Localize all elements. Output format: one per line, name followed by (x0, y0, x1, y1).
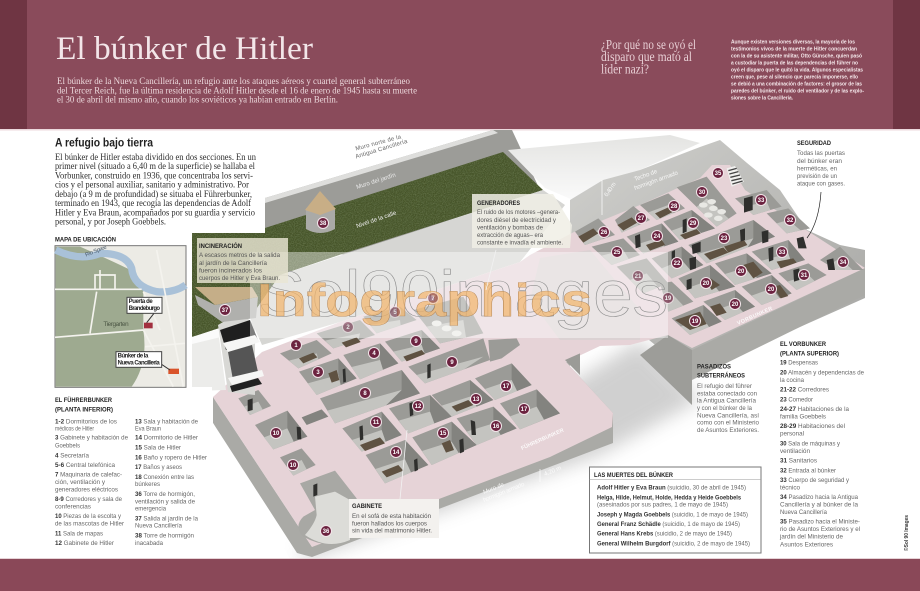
Vorbunker legend: 35 Pasadizo hacia el Ministe- (780, 518, 860, 526)
callout: incineración (197, 238, 288, 283)
box: las muertes del búnker: General Wilhelm Burgdorf (suicidio, 2 de mayo de 1945) (597, 540, 750, 548)
number markers (220, 168, 848, 536)
callout: pasadizos subterráneos: Nueva Cancillería, así (697, 412, 759, 419)
callout: seguridad: Todas las puertas (797, 150, 845, 157)
central grey block (530, 250, 640, 340)
Führerbunker legend heading (55, 395, 113, 414)
Führerbunker legend column 1: 8-9 Corredores y sala de (55, 496, 122, 503)
Führerbunker legend column 1: ción, ventilación y (55, 479, 106, 486)
text: garden labels: Nivel de la calle (356, 210, 398, 230)
number markers: 37 (222, 308, 229, 314)
Führerbunker legend column 2: Nueva Cancillería (135, 523, 182, 530)
Vorbunker legend: rio de Asuntos Exteriores y el (780, 526, 860, 533)
location map: Búnker de la (118, 354, 149, 360)
question answer text: testimonios vivos de la muerte de Hitler concuerdan (731, 46, 857, 52)
footer band (0, 558, 920, 591)
number markers: 19 (665, 296, 672, 302)
number markers: 17 (503, 384, 510, 390)
number markers: 9 (450, 360, 454, 366)
Vorbunker legend: 34 Pasadizo hacia la Antigua (780, 494, 858, 501)
box: las muertes del búnker: Joseph y Magda Goebbels (suicidio, 1 de mayo de 1945) (597, 512, 748, 518)
question answer text: Aunque existen versiones diversas, la mayoría de los (731, 39, 855, 45)
text: garden labels: Muro norte de la (355, 134, 403, 152)
number markers: 3 (316, 370, 320, 376)
number markers: 10 (273, 431, 280, 437)
number markers: 34 (840, 260, 847, 266)
garden wall and grass (192, 130, 565, 345)
intro text (57, 76, 417, 106)
section text: terminado en 1943, que recogía las dependencias de Adolf (55, 198, 252, 209)
number markers: 28 (671, 204, 678, 210)
callout: pasadizos subterráneos: y con el búnker de la (697, 405, 752, 412)
Führerbunker legend column 1: Goebbels (55, 442, 80, 449)
question heading: disparo que mató al (601, 49, 692, 64)
Führerbunker legend column 1: 3 Gabinete y habitación de (55, 434, 128, 442)
section text: primer nivel (situado a 6,40 m de la superficie) se hallaba el (55, 161, 255, 172)
title: El búnker de Hitler (56, 31, 313, 67)
floor labels: Muro de (483, 482, 506, 496)
callout: seguridad: herméticas, en (797, 166, 837, 172)
Vorbunker legend: Cancillería y al búnker de la (780, 502, 858, 508)
number markers: 5 (393, 310, 397, 316)
Vorbunker legend: jardín del Ministerio de (779, 534, 843, 540)
location map: Brandeburgo (129, 306, 160, 312)
question answer text: oyó el disparo que le quitó la vida. Algunos especialistas (731, 68, 863, 74)
Vorbunker legend: 31 Sanitarios (780, 458, 817, 464)
intro text: El búnker de la Nueva Cancillería, un refugio ante los ataques aéreos y cuartel general subterráneo (57, 76, 410, 87)
box: las muertes del búnker: LAS MUERTES DEL BÚNKER (594, 470, 673, 479)
callout: generadores: El ruido de los motores –genera- (477, 209, 560, 216)
box: las muertes del búnker: General Franz Schädle (suicidio, 1 de mayo de 1945) (597, 521, 740, 528)
callout: generadores: dores diésel de electricidad y (477, 217, 557, 224)
number markers: 17 (521, 407, 528, 413)
Führerbunker legend column 1: 4 Secretaría (55, 452, 89, 459)
number markers: 19 (692, 319, 699, 325)
Vorbunker legend: 20 Almacén y dependencias de (780, 370, 864, 376)
tower 38 (305, 191, 336, 233)
number markers: 7 (431, 296, 435, 302)
callout: pasadizos subterráneos: El refugio del führer (697, 383, 753, 390)
Führerbunker legend column 1: 7 Maquinaria de calefac- (55, 472, 122, 479)
number markers: 2 (346, 325, 350, 331)
question answer text (731, 39, 864, 101)
Vorbunker legend: 19 Despensas (780, 360, 818, 366)
Führerbunker legend column 1: 10 Piezas de la escolta y (55, 513, 122, 520)
location map: Tiergarten (103, 321, 129, 328)
header band (0, 0, 920, 130)
number markers: 13 (473, 397, 480, 403)
callout: seguridad: SEGURIDAD (797, 140, 831, 147)
callout: incineración: INCINERACIÓN (199, 242, 242, 250)
Vorbunker legend: 32 Entrada al búnker (780, 468, 837, 474)
callout: gabinete (349, 430, 439, 538)
callout: gabinete: GABINETE (352, 503, 382, 510)
number markers: 29 (690, 221, 697, 227)
number markers: 20 (768, 287, 775, 293)
Führerbunker legend column 1: de las mascotas de Hitler (55, 520, 125, 528)
callout: seguridad: ataque con gases. (797, 180, 845, 188)
callout: pasadizos subterráneos: la Antigua Cancillería (697, 398, 756, 405)
section text (55, 153, 256, 228)
section text: Hitler y Eva Braun, acompañados por su guardia y servicio (55, 208, 255, 218)
question heading: ¿Por qué no se oyó el (601, 37, 696, 52)
section text: debajo (a 9 m de profundidad) se situaba el Führerbunker, (55, 189, 252, 200)
concrete roof of Vorbunker (508, 135, 700, 200)
Führerbunker legend column 1: médicos de Hitler (55, 426, 95, 432)
number markers: 24 (654, 234, 661, 240)
floor labels: VORBUNKER (736, 306, 774, 327)
number markers: 20 (732, 302, 739, 308)
rooms: Führerbunker (238, 297, 580, 544)
question answer text: con la de su asistente militar, Otto Günsche, quien pasó (731, 53, 863, 59)
Vorbunker legend: 33 Cuerpo de seguridad y (780, 477, 850, 484)
Vorbunker legend: la cocina (780, 377, 804, 384)
number markers: 14 (393, 450, 400, 456)
number markers: 25 (614, 250, 621, 256)
Führerbunker legend column 2 (135, 418, 208, 547)
Führerbunker legend column 2: 16 Baño y ropero de Hitler (135, 454, 208, 461)
number markers: 15 (440, 431, 447, 437)
Vorbunker legend: 23 Comedor (780, 396, 814, 404)
Vorbunker legend: EL VORBUNKER (780, 341, 826, 348)
callout: gabinete: En el sofá de esta habitación (352, 513, 431, 520)
lower slab side wall (213, 362, 613, 557)
callout: pasadizos subterráneos: estaba conectado con (697, 390, 757, 397)
pink floor slab (213, 165, 865, 547)
number markers: 31 (801, 273, 808, 279)
question answer text: siones sobre la Cancillería. (731, 95, 793, 101)
Führerbunker legend column 2: 15 Sala de Hitler (135, 445, 182, 452)
question heading: líder nazi? (601, 62, 649, 76)
floor labels: Techo de (634, 169, 659, 183)
callout: pasadizos subterráneos: de Asuntos Exteriores. (697, 427, 759, 434)
Führerbunker legend heading: (PLANTA INFERIOR) (55, 406, 113, 414)
Führerbunker legend column 2: 36 Torre de hormigón, (135, 491, 195, 498)
section text: personal, y por Joseph Goebbels. (55, 218, 166, 228)
Vorbunker legend: 24-27 Habitaciones de la (780, 406, 849, 413)
number markers: 10 (290, 463, 297, 469)
location map: Río Spree (85, 244, 108, 259)
upper wall corner (640, 335, 692, 405)
Führerbunker legend column 2: Eva Braun (135, 426, 161, 432)
number markers: 38 (320, 221, 327, 227)
Vorbunker legend: 21-22 Corredores (780, 386, 829, 394)
watermark: Infographics (257, 274, 592, 326)
callout: generadores: extracción de aguas– era (477, 232, 543, 239)
Führerbunker legend column 1 (55, 418, 128, 547)
number markers: 4 (372, 351, 376, 357)
box: las muertes del búnker (590, 467, 761, 553)
Vorbunker legend: 30 Sala de máquinas y (780, 440, 841, 448)
floor labels: 6,40 m (604, 182, 618, 198)
location map: Puerta de (129, 299, 153, 305)
Vorbunker legend: Asuntos Exteriores (780, 542, 833, 548)
callout: generadores: GENERADORES (477, 200, 521, 207)
floor labels: hormigón armado (483, 482, 526, 504)
question answer text: creen que, pese al silencio que parecía imponerse, ello (731, 74, 859, 80)
Vorbunker legend (779, 341, 864, 548)
section text: Vorbunker, construido en 1936, que concentraba los servi- (55, 171, 253, 181)
incineration exit: stairs, pillar and hut (192, 287, 264, 395)
Führerbunker legend column 2: ventilación y salida de (135, 498, 195, 505)
callout: incineración: fueron incinerados los (199, 268, 262, 274)
Vorbunker legend: Nueva Cancillería (780, 509, 827, 516)
box: las muertes del búnker: Adolf Hitler y Eva Braun (suicidio, 30 de abril de 1945) (597, 484, 746, 492)
callout: gabinete: sin vida del matrimonio Hitler. (352, 528, 432, 534)
Vorbunker legend: técnico (780, 484, 800, 492)
question heading (601, 37, 696, 76)
rooms: Vorbunker (575, 166, 863, 335)
Führerbunker legend column 2: 17 Baños y aseos (135, 464, 182, 471)
Führerbunker legend column 1: 1-2 Dormitorios de los (55, 418, 117, 426)
callout: pasadizos subterráneos: SUBTERRÁNEOS (697, 371, 746, 380)
map heading: MAPA DE UBICACIÓN (55, 234, 116, 244)
number markers: 22 (674, 261, 681, 267)
number markers: 35 (715, 171, 722, 177)
Führerbunker legend column 2: 37 Salida al jardín de la (135, 515, 198, 522)
number markers: 20 (703, 281, 710, 287)
number markers: 33 (779, 250, 786, 256)
number markers: 33 (758, 198, 765, 204)
number markers: 1 (294, 343, 298, 349)
location map: Nueva Cancillería (118, 361, 160, 367)
number markers: 9 (414, 339, 418, 345)
text: garden labels: Muro del jardín (356, 173, 397, 191)
number markers: 27 (638, 216, 645, 222)
Führerbunker legend column 2: emergencia (135, 506, 166, 513)
Vorbunker legend: 28-29 Habitaciones del (780, 423, 845, 430)
text: garden labels (355, 134, 409, 230)
section heading: A refugio bajo tierra (55, 136, 153, 150)
box: las muertes del búnker: Helga, Hilde, Helmut, Holde, Hedda y Heide Goebbels (597, 494, 741, 502)
number markers: 23 (721, 236, 728, 242)
ground shadow (300, 340, 700, 562)
number markers: 26 (601, 230, 608, 236)
Führerbunker legend column 2: búnkeres (135, 481, 160, 488)
intro text: del Tercer Reich, fue la última residencia de Adolf Hitler desde el 16 de enero de 1945 hasta su muerte (57, 85, 417, 96)
box: las muertes del búnker: (asesinados por sus padres, 1 de mayo de 1945) (597, 502, 728, 508)
question answer text: a custodiar la puerta de las dependencias del führer no (731, 60, 859, 66)
Führerbunker legend column 2: 18 Conexión entre las (135, 474, 194, 481)
callout: pasadizos subterráneos: como con el Ministerio (697, 420, 759, 427)
callout: generadores: ventilación y bombas de (477, 224, 543, 232)
number markers: 16 (493, 424, 500, 430)
location map (55, 244, 186, 387)
Vorbunker legend: (PLANTA SUPERIOR) (780, 350, 839, 357)
number markers: 36 (323, 529, 330, 535)
number markers: 30 (699, 190, 706, 196)
number markers: 20 (738, 269, 745, 275)
number markers: 12 (415, 404, 422, 410)
Führerbunker legend column 1: generadores eléctricos (55, 486, 118, 494)
box: las muertes del búnker: General Hans Krebs (suicidio, 2 de mayo de 1945) (597, 530, 732, 538)
Führerbunker legend column 1: 11 Sala de mapas (55, 530, 103, 538)
number markers: 8 (363, 391, 367, 397)
Führerbunker legend column 1: 12 Gabinete de Hitler (55, 540, 115, 547)
Führerbunker legend heading: EL FÜHRERBUNKER (55, 395, 112, 404)
floor labels: hormigón armado (634, 170, 680, 192)
text: garden labels: Antigua Cancillería (355, 139, 409, 160)
intro text: el 30 de abril del mismo año, cuando los soviéticos ya habían entrado en Berlín. (57, 96, 338, 106)
callout: incineración: A escasos metros de la salida (199, 252, 280, 259)
question answer text: paredes del búnker, el ruido del ventilador y de las explo- (731, 88, 864, 94)
white panel behind left text (0, 130, 290, 559)
callout: pasadizos subterráneos (697, 364, 759, 434)
Führerbunker legend column 2: 14 Dormitorio de Hitler (135, 434, 199, 442)
callout: seguridad: del búnker eran (797, 158, 842, 165)
callout: incineración: cuerpos de Hitler y Eva Braun. (199, 275, 280, 282)
floor labels: 4,20 m (544, 466, 562, 478)
section text: El búnker de Hitler estaba dividido en dos secciones. En un (55, 153, 256, 163)
callout: gabinete: fueron hallados los cuerpos (352, 520, 427, 528)
Führerbunker legend column 1: conferencias (55, 504, 91, 510)
callout: incineración: al jardín de la Cancillería (199, 260, 267, 267)
section text: cios y el personal auxiliar, sanitario y administrativo. Por (55, 181, 250, 191)
rough rock walls (570, 140, 865, 375)
watermark: Sol90images (258, 257, 668, 330)
Vorbunker legend: personal (780, 430, 804, 438)
number markers: 11 (373, 420, 380, 426)
callout: seguridad: previsión de un (797, 173, 837, 180)
floor labels: FÜHRERBUNKER (520, 427, 565, 452)
credit: ©Sol 90 Images (903, 515, 910, 551)
number markers: 32 (787, 218, 794, 224)
callout: pasadizos subterráneos: PASADIZOS (697, 364, 732, 370)
question answer text: se debió a una combinación de factores: el grosor de las (731, 81, 862, 87)
callout: generadores: constante e invadía el ambiente. (477, 240, 563, 246)
callout: generadores (472, 194, 572, 290)
Führerbunker legend column 2: inacabada (135, 540, 163, 547)
Führerbunker legend column 1: 5-6 Central telefónica (55, 462, 115, 469)
Vorbunker legend: familia Goebbels (780, 414, 826, 420)
number markers: 21 (635, 274, 642, 280)
Führerbunker legend column 2: 38 Torre de hormigón (135, 533, 194, 540)
Führerbunker legend column 2: 13 Sala y habitación de (135, 418, 198, 426)
floor labels (483, 169, 774, 504)
callout: seguridad (797, 140, 845, 238)
Vorbunker legend: ventilación (780, 448, 810, 455)
